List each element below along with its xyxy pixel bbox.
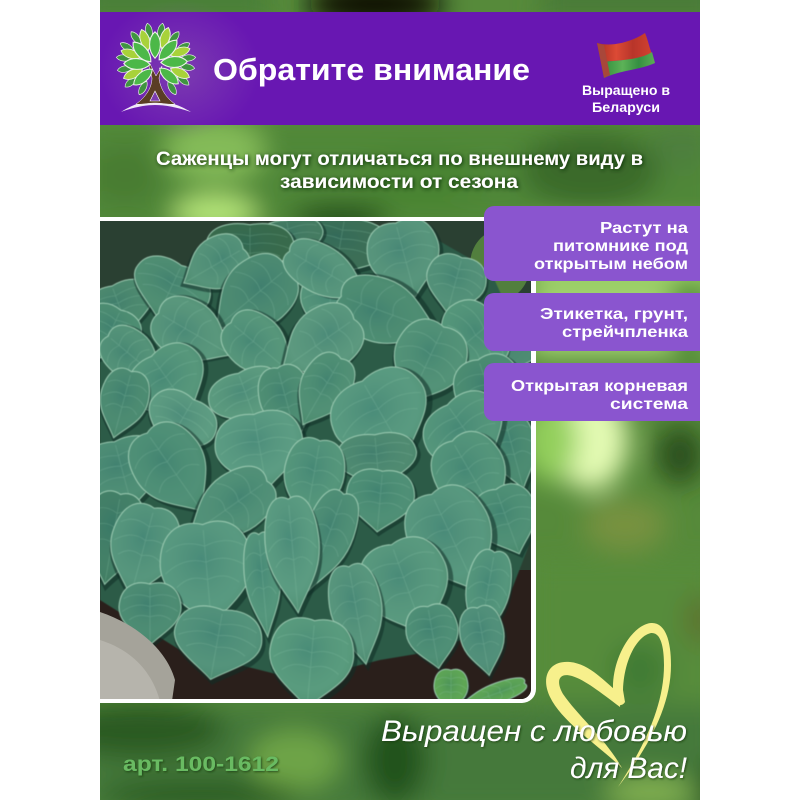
leaves, back to front	[100, 221, 531, 680]
rock	[100, 612, 175, 701]
callout: grown outdoors: открытым небом	[534, 256, 688, 273]
callout: bare root: Открытая корневая	[511, 378, 688, 395]
callout: grown outdoors	[484, 206, 700, 281]
callout: packaging: стрейчпленка	[562, 324, 688, 341]
photo: hosta plant	[100, 221, 531, 699]
notice text: Саженцы могут отличаться по внешнему виду в	[156, 149, 643, 170]
label: grown in Belarus: Беларуси	[592, 99, 660, 115]
callout: packaging	[484, 293, 700, 351]
notice text	[156, 149, 643, 193]
callout: grown outdoors: питомнике под	[553, 238, 688, 255]
photo frame	[100, 217, 536, 703]
background: green bokeh	[100, 0, 700, 800]
callout: grown outdoors: Растут на	[600, 220, 688, 237]
callout: bare root: система	[610, 396, 688, 413]
panel: feature list	[484, 206, 700, 421]
article number: арт. 100-1612	[123, 753, 279, 776]
label: grown in Belarus	[582, 82, 670, 115]
icon: Belarus flag	[597, 33, 655, 78]
slogan: для Вас!	[570, 752, 688, 785]
logo: tree	[116, 23, 196, 112]
icon: yellow heart	[546, 623, 671, 787]
heading: title: Обратите внимание	[213, 52, 530, 87]
slogan	[381, 715, 688, 785]
callout: bare root	[484, 363, 700, 421]
slogan: Выращен с любовью	[381, 715, 687, 748]
label: grown in Belarus: Выращено в	[582, 82, 670, 98]
notice text: зависимости от сезона	[280, 172, 518, 193]
header band	[100, 0, 700, 140]
callout: packaging: Этикетка, грунт,	[540, 306, 688, 323]
foreground leaves	[173, 604, 528, 699]
